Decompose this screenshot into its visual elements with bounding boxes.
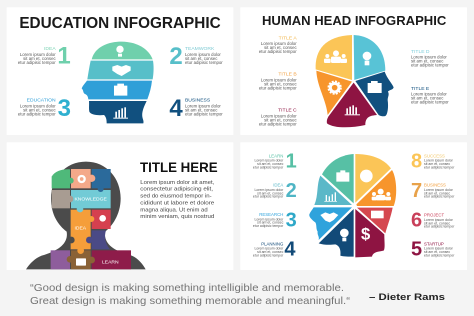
heading: title here: TITLE HERE <box>140 159 218 175</box>
icon: bar chart <box>113 107 128 119</box>
item: learn <box>253 151 297 173</box>
item: startup: 5 <box>411 238 422 260</box>
item: planning: Lorem ipsum dolor <box>254 247 284 251</box>
puzzle pieces <box>51 169 131 269</box>
item: teamwork: Lorem ipsum dolor <box>185 52 221 57</box>
panel: puzzle head <box>7 142 233 270</box>
item: learn: sit am et, consec <box>257 162 284 166</box>
icon: bulb <box>340 229 349 241</box>
item: title d: etur adipisic tempor <box>411 63 449 68</box>
item: idea: etur adipisic tempor <box>18 60 56 65</box>
icon: briefcase <box>76 258 86 266</box>
item: business: BUSINESS <box>424 183 446 188</box>
head: eight wedges <box>309 154 396 257</box>
item: idea <box>253 180 297 202</box>
item: teamwork: 2 <box>169 43 183 70</box>
icon: handshake <box>320 212 338 222</box>
item: title a: TITLE A <box>279 35 297 41</box>
quote: Great design is making something memorable and meaningful.“ <box>30 295 351 307</box>
head: five wedges <box>316 35 394 127</box>
item: planning: PLANNING <box>261 241 284 246</box>
icon: bulb <box>116 46 124 57</box>
item: business: 7 <box>411 180 422 202</box>
item: idea: etur adipisic tempor <box>253 195 284 199</box>
icon: handshake <box>112 65 131 76</box>
item: success: 8 <box>411 150 422 172</box>
item: title c: etur adipisic tempor <box>259 121 297 126</box>
item: startup: STARTUP <box>424 241 444 246</box>
quote: “Good design is making something intelligible and memorable. <box>30 282 344 294</box>
item: business <box>411 180 455 202</box>
item: title c: sit am et, consec <box>264 117 297 122</box>
icon: bar chart <box>324 192 337 202</box>
item: title c: Lorem ipsum dolor <box>261 113 297 118</box>
attribution: – Dieter Rams <box>369 292 445 303</box>
item: education <box>18 95 71 122</box>
item: planning: etur adipisic tempor <box>253 253 284 257</box>
item: idea: IDEA <box>44 46 56 52</box>
item: business <box>169 95 223 122</box>
item: research: 3 <box>286 210 297 232</box>
item: title d: Lorem ipsum dolor <box>411 55 447 60</box>
item: success: SUCCESS <box>424 153 445 158</box>
item: title c <box>259 108 297 126</box>
text block: lorem: consectetur adipiscing elit, <box>140 187 213 193</box>
item: title b <box>259 72 297 90</box>
item: research <box>253 210 297 232</box>
item: project: 6 <box>411 210 422 232</box>
label: knowledge: KNOWLEDGE <box>74 197 108 203</box>
item: idea: Lorem ipsum dolor <box>254 188 284 192</box>
icon: envelope <box>371 211 384 218</box>
label: learn: LEARN <box>102 259 119 265</box>
item: title d: sit am et, consec <box>411 59 444 64</box>
item: title b: sit am et, consec <box>264 81 297 86</box>
item: learn: LEARN <box>269 153 283 158</box>
item: business: BUSINESS <box>185 98 211 104</box>
item: education: etur adipisic tempor <box>18 111 56 116</box>
item: startup: etur adipisic tempor <box>424 253 455 257</box>
icon: pie <box>360 170 373 182</box>
item: title b: Lorem ipsum dolor <box>261 77 297 82</box>
item: success: Lorem ipsum dolor <box>424 159 454 163</box>
item: project: PROJECT <box>424 213 445 218</box>
text block: lorem: sed do eiusmod tempor in- <box>140 194 212 200</box>
text block: lorem: cididunt ut labore et dolore <box>140 200 214 206</box>
item: research: sit am et, consec <box>257 221 284 225</box>
title: human head: HUMAN HEAD INFOGRAPHIC <box>262 13 447 28</box>
item: success <box>411 150 455 172</box>
panel: eight segment head <box>240 142 467 270</box>
panel: education infographic <box>7 7 233 135</box>
item: business: etur adipisic tempor <box>424 195 455 199</box>
item: title a: Lorem ipsum dolor <box>261 41 297 46</box>
text block: lorem: Lorem ipsum dolor sit amet, <box>140 180 215 186</box>
item: idea: Lorem ipsum dolor <box>20 52 56 57</box>
item: idea: sit am et, consec <box>23 56 56 61</box>
item: startup: Lorem ipsum dolor <box>424 247 454 251</box>
item: learn: Lorem ipsum dolor <box>254 159 284 163</box>
item: learn: etur adipisic tempor <box>253 165 284 169</box>
item: title a <box>259 35 297 54</box>
item: idea <box>18 42 71 69</box>
item: business: Lorem ipsum dolor <box>185 103 221 108</box>
silhouette <box>26 162 146 269</box>
item: title e: TITLE E <box>411 86 430 92</box>
item: title b: TITLE B <box>278 72 297 78</box>
item: research: etur adipisic tempor <box>253 224 284 228</box>
icon: team <box>372 189 391 200</box>
item: project: sit am et, consec <box>424 221 450 225</box>
item: idea: 1 <box>57 42 71 69</box>
item: research: RESEARCH <box>259 212 283 217</box>
item: business: 4 <box>169 95 183 122</box>
item: success: sit am et, consec <box>424 162 450 166</box>
text block: lorem: magna aliqua. Ut enim ad <box>140 207 208 213</box>
item: title a: etur adipisic tempor <box>259 49 297 54</box>
icon: gear <box>328 81 341 94</box>
text block: lorem <box>140 180 215 220</box>
icon: bulb <box>99 215 106 222</box>
item: business: sit am et, consec <box>424 191 450 195</box>
item: teamwork <box>169 43 223 70</box>
item: title d: TITLE D <box>411 49 430 55</box>
item: education: Lorem ipsum dolor <box>20 103 56 108</box>
icon: bulb <box>363 52 371 65</box>
icon: bar chart <box>345 105 360 115</box>
item: learn: 1 <box>286 151 297 173</box>
item: idea: 2 <box>286 180 297 202</box>
item: project: etur adipisic tempor <box>424 225 455 229</box>
title: education: EDUCATION INFOGRAPHIC <box>19 15 221 32</box>
label: idea: IDEA <box>75 226 87 232</box>
item: idea: sit am et, consec <box>257 191 284 195</box>
item: planning <box>253 238 295 260</box>
panel: human head infographic <box>240 7 467 135</box>
item: success: etur adipisic tempor <box>424 165 455 169</box>
item: title d <box>411 49 449 68</box>
item: teamwork: sit am et, consec <box>185 56 218 61</box>
item: startup <box>411 238 455 260</box>
item: education: EDUCATION <box>27 98 56 104</box>
item: title e: Lorem ipsum dolor <box>411 92 447 97</box>
item: title e: sit am et, consec <box>411 96 444 101</box>
quote <box>30 282 351 307</box>
item: business: sit am et, consec <box>185 107 218 112</box>
item: startup: sit am et, consec <box>424 250 450 254</box>
item: planning: 4 <box>284 238 295 260</box>
item: title b: etur adipisic tempor <box>259 85 297 90</box>
item: business: Lorem ipsum dolor <box>424 188 454 192</box>
icon: dollar: $ <box>361 225 371 244</box>
item: planning: sit am et, consec <box>257 250 284 254</box>
item: project <box>411 210 455 232</box>
item: education: sit am et, consec <box>23 107 56 112</box>
head: four bands <box>82 42 154 123</box>
icon: briefcase <box>336 170 349 182</box>
item: title c: TITLE C <box>278 108 297 114</box>
item: title e <box>411 86 449 105</box>
icon: briefcase <box>368 81 382 93</box>
item: research: Lorem ipsum dolor <box>254 217 284 221</box>
icon: gear <box>79 176 85 182</box>
item: teamwork: etur adipisic tempor <box>185 60 223 65</box>
icon: team <box>324 50 347 63</box>
item: idea: IDEA <box>273 183 283 188</box>
item: project: Lorem ipsum dolor <box>424 218 454 222</box>
item: title e: etur adipisic tempor <box>411 100 449 105</box>
item: business: etur adipisic tempor <box>185 111 223 116</box>
item: education: 3 <box>58 95 71 122</box>
item: teamwork: TEAMWORK <box>185 46 215 52</box>
text block: lorem: minim veniam, quis nostrud <box>140 214 214 220</box>
item: title a: sit am et, consec <box>264 45 297 50</box>
icon: briefcase <box>114 84 127 96</box>
